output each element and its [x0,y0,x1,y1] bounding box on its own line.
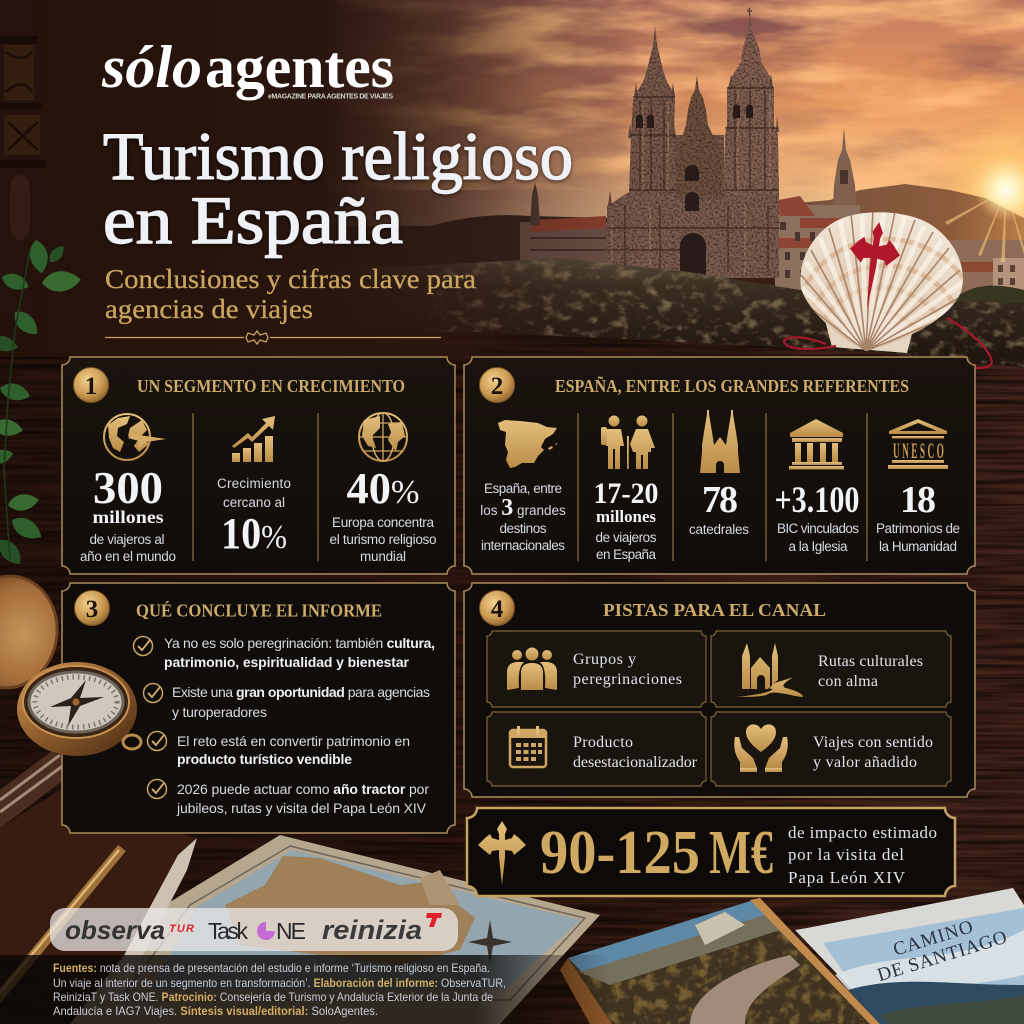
logo: Task ONE: Task [208,918,248,944]
check item 2: y turoperadores [172,704,267,720]
logo: Task ONE: NE [276,918,306,944]
stat: 40%: Europa concentra [332,515,434,530]
subtitle [105,264,476,324]
stat: 90-125 M€: M€ [709,819,773,887]
title: Turismo religioso [103,118,573,194]
stat: crecimiento 10%: cercano al [223,495,285,510]
badge 1 [74,368,108,402]
heading 2: ESPAÑA, ENTRE LOS GRANDES REFERENTES [555,376,909,396]
icon: UNESCO temple [888,419,948,469]
stat: 90-125 M€: 90-125 [540,819,700,887]
partner logos strip [50,908,458,951]
subtitle: agencias de viajes [105,294,313,324]
badge 3 [74,590,110,626]
check item 1: Ya no es solo peregrinación: también cultura, [164,635,435,651]
icon: growth chart [232,416,275,462]
icon: globe [359,413,407,461]
check item 2: Existe una gran oportunidad para agencias [172,684,430,700]
icon: pilgrims [601,416,655,469]
icon: temple [789,419,844,470]
leather notebook [0,790,195,960]
carved wooden post [0,0,54,315]
icon: heart in hands [734,724,788,772]
icon: calendar [510,726,546,767]
stat: crecimiento 10% [217,476,291,558]
panel 2: España entre los grandes referentes [464,357,975,574]
stat: 18 patrimonios [876,479,960,554]
card: grupos y peregrinaciones [487,631,706,707]
icon: church and road [736,643,803,697]
logo: Task ONE [208,918,306,944]
dark gradient behind title [0,0,640,357]
guide book with landscape photo [560,895,880,1024]
stat: 17-20 millones: en España [596,547,656,562]
card: viajes con sentido: Viajes con sentido [813,734,933,751]
panel 3: qué concluye el informe [62,583,455,833]
stat: 40% [330,464,436,564]
stat: +3.100 BIC [774,480,860,554]
logo: sóloagentes [101,34,394,100]
stat: top 3 destinos: España, entre [484,481,562,496]
badge 3: 3 [86,596,98,623]
stat: 40%: 40% [346,464,420,513]
badge 4 [480,590,514,626]
check item 2 [144,684,430,720]
banner text: Papa León XIV [788,868,906,887]
heading 3: QUÉ CONCLUYE EL INFORME [136,600,382,620]
card: viajes con sentido: y valor añadido [813,754,917,771]
compass body [17,662,137,756]
stat: 78 catedrales [689,479,749,537]
logo: reinizia: reinizia [322,915,422,945]
stat: +3.100 BIC: +3.100 [774,480,860,521]
stat: crecimiento 10%: 10% [221,509,287,558]
check item 4 [148,780,429,816]
map compass rose [468,920,512,964]
card: rutas culturales [711,631,951,707]
stat: 300 millones: año en el mundo [80,549,176,564]
Camino de Santiago book: CAMINO [891,916,975,961]
stat: 40%: mundial [360,549,406,564]
footer credits: Fuentes: nota de prensa de presentación del estudio e informe ‘Turismo religioso en España. [53,961,490,975]
card: producto desestacionalizador: desestacionalizador [573,754,698,771]
stat: 17-20 millones: millones [596,507,656,526]
icon: UNESCO temple: UNESCO [893,438,944,463]
compass [0,570,141,756]
icon: cathedral [700,410,740,473]
old map on table [70,835,600,1024]
card: producto desestacionalizador [487,712,706,786]
card: rutas culturales: con alma [818,673,878,690]
check item 4: jubileos, rutas y visita del Papa León XIV [176,800,427,816]
logo: sóloagentes: sólo [101,34,202,100]
footer credits: Andalucía e IAG7 Viajes. Síntesis visual/editorial: SoloAgentes. [53,1004,378,1018]
Camino de Santiago book: DE SANTIAGO [875,927,1009,986]
stat: 300 millones: millones [92,507,164,527]
banner text: por la visita del [788,845,904,864]
stat: top 3 destinos: los 3 grandes [480,495,566,521]
stat: 300 millones [80,462,176,564]
small stack of notebooks [0,751,77,828]
stat: 17-20 millones: 17-20 [594,477,658,510]
stat: crecimiento 10%: Crecimiento [217,476,291,491]
badge 4: 4 [491,596,504,623]
heading 4: PISTAS PARA EL CANAL [603,600,826,620]
green leaves on the left [0,238,82,569]
banner text: de impacto estimado [788,823,937,842]
brass pen [0,848,122,1002]
check item 4: 2026 puede actuar como año tractor por [177,781,429,797]
Camino de Santiago book [795,888,1024,1024]
card: producto desestacionalizador: Producto [573,734,633,751]
logo: sóloagentes: agentes [205,34,394,100]
logo: observaTUR: observa [65,915,165,945]
banner text [788,823,937,887]
stat: top 3 destinos [480,481,566,553]
footer credits: ReiniziaT y Task ONE. Patrocinio: Consejería de Turismo y Andalucía Exterior de la Junta de [53,990,493,1004]
subtitle: Conclusiones y cifras clave para [105,264,476,294]
icon: map of Spain [498,420,557,468]
scallop shell with red Santiago cross [784,210,992,368]
card: grupos y peregrinaciones: peregrinaciones [573,671,682,688]
footer credits: Un viaje al interior de un segmento en transformación’. Elaboración del informe: ObservaTUR, [53,976,506,990]
stat: 18 patrimonios: 18 [900,479,936,521]
stat: 18 patrimonios: la Humanidad [879,539,957,554]
heading 1: UN SEGMENTO EN CRECIMIENTO [137,376,405,396]
stat: 78 catedrales: 78 [702,479,738,521]
card: grupos y peregrinaciones: Grupos y [573,651,636,668]
stat: top 3 destinos: destinos [500,521,547,536]
stat: 17-20 millones: de viajeros [596,530,657,545]
badge 2: 2 [491,373,503,400]
compass rose [50,680,104,726]
photo: sunset sky [338,0,1024,226]
panel 4: pistas para el canal [464,583,975,797]
logo: observaTUR: TUR [169,923,194,935]
title: en España [103,182,403,258]
check item 3: producto turístico vendible [177,751,352,767]
photo: distant hill and town [250,128,1024,306]
badge 2 [480,368,514,402]
stat: 78 catedrales: catedrales [689,522,749,537]
footer credits [0,955,610,1024]
badge 1: 1 [85,373,97,400]
check item 1: patrimonio, espiritualidad y bienestar [164,654,410,670]
card: viajes con sentido [711,712,951,786]
check item 1 [134,635,435,670]
stat: 17-20 millones [594,477,658,562]
photo: cathedral of Santiago [607,8,779,278]
icon: group of people [507,648,557,690]
stat: +3.100 BIC: a la Iglesia [788,539,848,554]
icon: globe with plane [104,414,166,460]
stat: 40%: el turismo religioso [330,532,436,547]
icon: Santiago cross [478,821,526,885]
stat: top 3 destinos: internacionales [481,538,565,553]
panel 1: un segmento en crecimiento [62,357,455,574]
check item 3 [148,732,410,767]
logo: sóloagentes: eMAGAZINE PARA AGENTES DE VIAJES [268,94,393,100]
check item 3: El reto está en convertir patrimonio en [177,733,410,749]
stat: 300 millones: de viajeros al [90,532,164,547]
stat: 300 millones: 300 [93,462,163,513]
stat: 18 patrimonios: Patrimonios de [876,521,960,536]
stat: +3.100 BIC: BIC vinculados [777,521,859,536]
card: rutas culturales: Rutas culturales [818,653,923,670]
compass lid [0,570,64,694]
banner: impacto estimado [467,808,955,896]
photo: stone wall [422,258,1024,368]
title [103,118,573,258]
notebook page edges [100,838,197,1000]
ornamental divider [105,331,441,344]
